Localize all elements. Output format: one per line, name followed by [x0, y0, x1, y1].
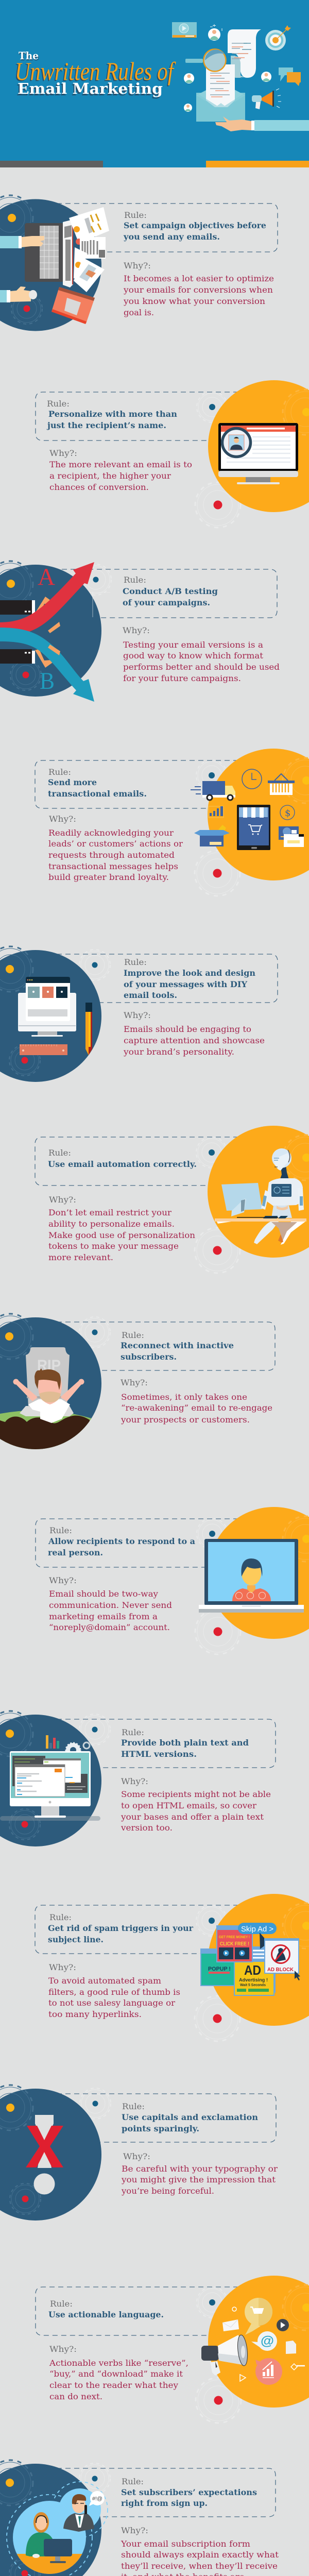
illustration: campaign desk [0, 195, 109, 331]
illustration: video call on laptop [199, 1507, 309, 1639]
rule text: Use capitals and exclamation [122, 2112, 258, 2122]
why text: “re-awakening” email to re-engage [121, 1403, 272, 1413]
rule text [121, 2477, 257, 2508]
illustration: spam popups: POPUP ! [208, 1966, 231, 1972]
why text: transactional messages helps [48, 861, 178, 871]
illustration: spam popups: GET FREE MONEY ! [219, 1935, 250, 1939]
why text: Why?: [123, 625, 150, 635]
why text: should always explain exactly what [121, 2550, 279, 2560]
rule text [48, 2299, 164, 2319]
why text: to open HTML emails, so cover [121, 1801, 256, 1810]
why text [121, 1776, 271, 1833]
rule text: Set campaign objectives before [124, 221, 266, 230]
icon: email, scroll and marketing icons [172, 22, 309, 131]
why text [123, 1010, 265, 1057]
why text [49, 448, 192, 492]
panel: rule 12 [36, 2276, 309, 2423]
why text [123, 261, 274, 317]
why text [121, 2151, 278, 2196]
why text: you might give the impression that [121, 2175, 276, 2184]
why text: Some recipients might not be able [121, 1789, 271, 1799]
rule text: Provide both plain text and [121, 1738, 249, 1748]
illustration: A/B testing arrows: B [40, 668, 55, 694]
illustration: personalized profile monitor [208, 380, 309, 512]
why text: Testing your email versions is a [123, 640, 263, 650]
why text: too many hyperlinks. [48, 2009, 142, 2019]
rule text [48, 1148, 197, 1169]
rule text: email tools. [124, 990, 177, 1000]
why text: Why?: [49, 1962, 76, 1972]
why text: Sometimes, it only takes one [121, 1392, 247, 1402]
illustration: crossed-out exclamation point [0, 2085, 101, 2221]
illustration: spam popups: Wait 5 Seconds [240, 1984, 266, 1987]
why text: goal is. [124, 308, 154, 317]
rule text [121, 1330, 234, 1362]
illustration: transactional e-commerce icons [191, 749, 309, 880]
why text: your bases and offer a plain text [121, 1812, 264, 1822]
illustration: robot at computer [208, 1126, 309, 1258]
rule text [124, 957, 255, 1000]
why text: Why?: [121, 1776, 148, 1786]
why text: Why?: [49, 2344, 77, 2354]
rule text: Rule: [122, 2477, 144, 2486]
why text: Don’t let email restrict your [48, 1208, 171, 1217]
rule text: Reconnect with inactive [121, 1341, 234, 1350]
why text: tokens to make your message [48, 1241, 179, 1251]
illustration: man rising from grave [0, 1314, 103, 1461]
why text: Readily acknowledging your [48, 828, 174, 838]
rule text: Rule: [49, 1526, 72, 1535]
why text: you know what your conversion [123, 296, 265, 306]
rule text [48, 1526, 195, 1557]
rule text: real person. [48, 1548, 103, 1557]
panel: rule 1 [0, 195, 278, 331]
rule text [121, 1727, 249, 1759]
why text [49, 2344, 188, 2401]
why text: your brand’s personality. [123, 1047, 234, 1057]
panel: rule 6 [35, 1126, 309, 1273]
why text: Why?: [49, 448, 77, 458]
why text: requests through automated [48, 850, 175, 860]
rule text [123, 575, 218, 607]
rule text: Conduct A/B testing [123, 586, 218, 596]
why text [48, 1962, 180, 2019]
rule text [122, 2102, 258, 2133]
title: Email Marketing [18, 80, 163, 97]
panel: rule 9 [0, 1711, 276, 1846]
why text: a recipient, the higher your [49, 471, 171, 481]
why text: you’re being forceful. [121, 2186, 214, 2196]
rule text: Rule: [48, 767, 71, 777]
panel: rule 13 [0, 2460, 279, 2576]
rule text: transactional emails. [48, 789, 147, 799]
illustration: transactional e-commerce icons: $ [285, 808, 290, 819]
rule text [46, 399, 177, 430]
why text: It becomes a lot easier to optimize [124, 274, 274, 283]
why text: for your future campaigns. [123, 673, 241, 683]
illustration: spam popups [201, 1894, 309, 2026]
why text: Email should be two-way [49, 1589, 158, 1599]
rule text: you send any emails. [123, 232, 220, 242]
why text: Why?: [49, 1575, 77, 1585]
why text: version too. [121, 1823, 173, 1833]
why text: communication. Never send [49, 1600, 172, 1610]
section band [0, 161, 309, 167]
why text: Why?: [121, 1378, 148, 1387]
why text [123, 625, 280, 683]
why text: your emails for conversions when [123, 285, 273, 295]
rule text: Rule: [47, 399, 70, 409]
why text: ability to personalize emails. [48, 1219, 175, 1229]
rule text: Rule: [122, 1330, 144, 1340]
illustration: spam popups: CLICK FREE ! [220, 1941, 249, 1947]
title [15, 49, 176, 97]
illustration: megaphone with marketing icons: @ [261, 2334, 274, 2348]
why text [48, 1195, 195, 1262]
why text: clear to the reader what they [49, 2380, 178, 2390]
rule text: Set subscribers’ expectations [121, 2487, 257, 2497]
rule text: of your campaigns. [123, 598, 210, 607]
panel: rule 11 [0, 2085, 278, 2221]
why text: “buy,” and “download” make it [49, 2369, 183, 2379]
illustration: spam popups: Advertising ! [239, 1977, 268, 1983]
rule text: subscribers. [121, 1352, 177, 1362]
why text: To avoid automated spam [48, 1976, 161, 1986]
panel: rule 8 [36, 1507, 309, 1654]
panel: rule 10 [35, 1894, 309, 2041]
illustration: A/B testing arrows [0, 561, 110, 702]
why text: performs better and should be used [123, 662, 280, 672]
panel: rule 2 [36, 380, 309, 528]
rule text [48, 767, 147, 799]
rule text: Rule: [124, 575, 146, 585]
illustration: spam popups: Skip Ad > [241, 1925, 273, 1934]
rule text: Rule: [48, 1148, 71, 1158]
panel: rule 4 [35, 749, 309, 896]
rule text: Use email automation correctly. [48, 1159, 197, 1169]
why text: they’ll receive, when they’ll receive [121, 2561, 278, 2571]
rule text: subject line. [48, 1935, 104, 1944]
rule text: Rule: [122, 1727, 144, 1737]
panel: rule 7 [0, 1314, 275, 1461]
why text: good way to know which format [123, 651, 264, 660]
rule text: Rule: [50, 2299, 73, 2309]
why text: filters, a good rule of thumb is [48, 1987, 180, 1997]
rule text [123, 210, 266, 242]
illustration: A/B testing arrows: A [38, 564, 55, 590]
rule text: Rule: [49, 1912, 72, 1922]
rule text: Use actionable language. [48, 2310, 164, 2319]
why text: Why?: [121, 2526, 148, 2535]
illustration: man rising from grave: RIP [37, 1357, 61, 1374]
why text: chances of conversion. [49, 482, 149, 492]
why text: Why?: [49, 814, 76, 824]
why text: Make good use of personalization [48, 1230, 195, 1240]
why text: to not use salesy language or [48, 1998, 175, 2008]
why text: more relevant. [48, 1252, 113, 1262]
rule text: Allow recipients to respond to a [48, 1536, 195, 1546]
why text: your prospects or customers. [121, 1415, 250, 1425]
title: Unwritten Rules of [15, 57, 176, 86]
why text: can do next. [49, 2392, 102, 2401]
why text: Why?: [123, 2151, 150, 2161]
why text: “noreply@domain” account. [49, 1622, 170, 1632]
illustration: megaphone with marketing icons [201, 2276, 309, 2408]
rule text: just the recipient’s name. [46, 420, 166, 430]
header banner [0, 0, 309, 167]
rule text: HTML versions. [121, 1749, 197, 1759]
why text: The more relevant an email is to [49, 460, 192, 469]
panel: rule 3 [0, 561, 280, 702]
rule text [48, 1912, 194, 1944]
why text [48, 814, 183, 882]
why text: marketing emails from a [49, 1612, 158, 1621]
rule text: Improve the look and design [124, 968, 255, 978]
rule text: Rule: [122, 2102, 145, 2111]
rule text: Send more [48, 777, 97, 787]
why text: Why?: [124, 261, 151, 270]
why text: Your email subscription form [121, 2539, 250, 2549]
why text [49, 1575, 172, 1632]
why text: capture attention and showcase [124, 1036, 265, 1045]
why text [121, 1378, 272, 1425]
rule text: Rule: [124, 210, 147, 220]
why text: build greater brand loyalty. [48, 872, 169, 882]
why text: Why?: [49, 1195, 76, 1205]
rule text: Rule: [124, 957, 147, 967]
illustration: spam popups: AD BLOCK [267, 1967, 294, 1973]
illustration: plain text and HTML windows [0, 1711, 101, 1846]
why text: Actionable verbs like “reserve”, [49, 2358, 188, 2368]
rule text: Get rid of spam triggers in your [48, 1923, 194, 1933]
title: The [19, 49, 39, 62]
rule text: right from sign up. [121, 2498, 208, 2508]
illustration: call center conversation: #!@ [92, 2496, 102, 2502]
rule text: Personalize with more than [48, 409, 177, 419]
why text: leads’ or customers’ actions or [48, 839, 183, 849]
why text: Be careful with your typography or [122, 2164, 278, 2174]
rule text: of your messages with DIY [124, 979, 248, 989]
why text: Why?: [124, 1010, 151, 1020]
illustration: email design tools [0, 946, 101, 1082]
panel: rule 5 [0, 946, 278, 1082]
why text: Emails should be engaging to [124, 1024, 251, 1034]
rule text: points sparingly. [122, 2124, 199, 2133]
illustration: call center conversation [0, 2460, 108, 2576]
why text [121, 2526, 279, 2576]
illustration: spam popups: AD [244, 1962, 261, 1978]
